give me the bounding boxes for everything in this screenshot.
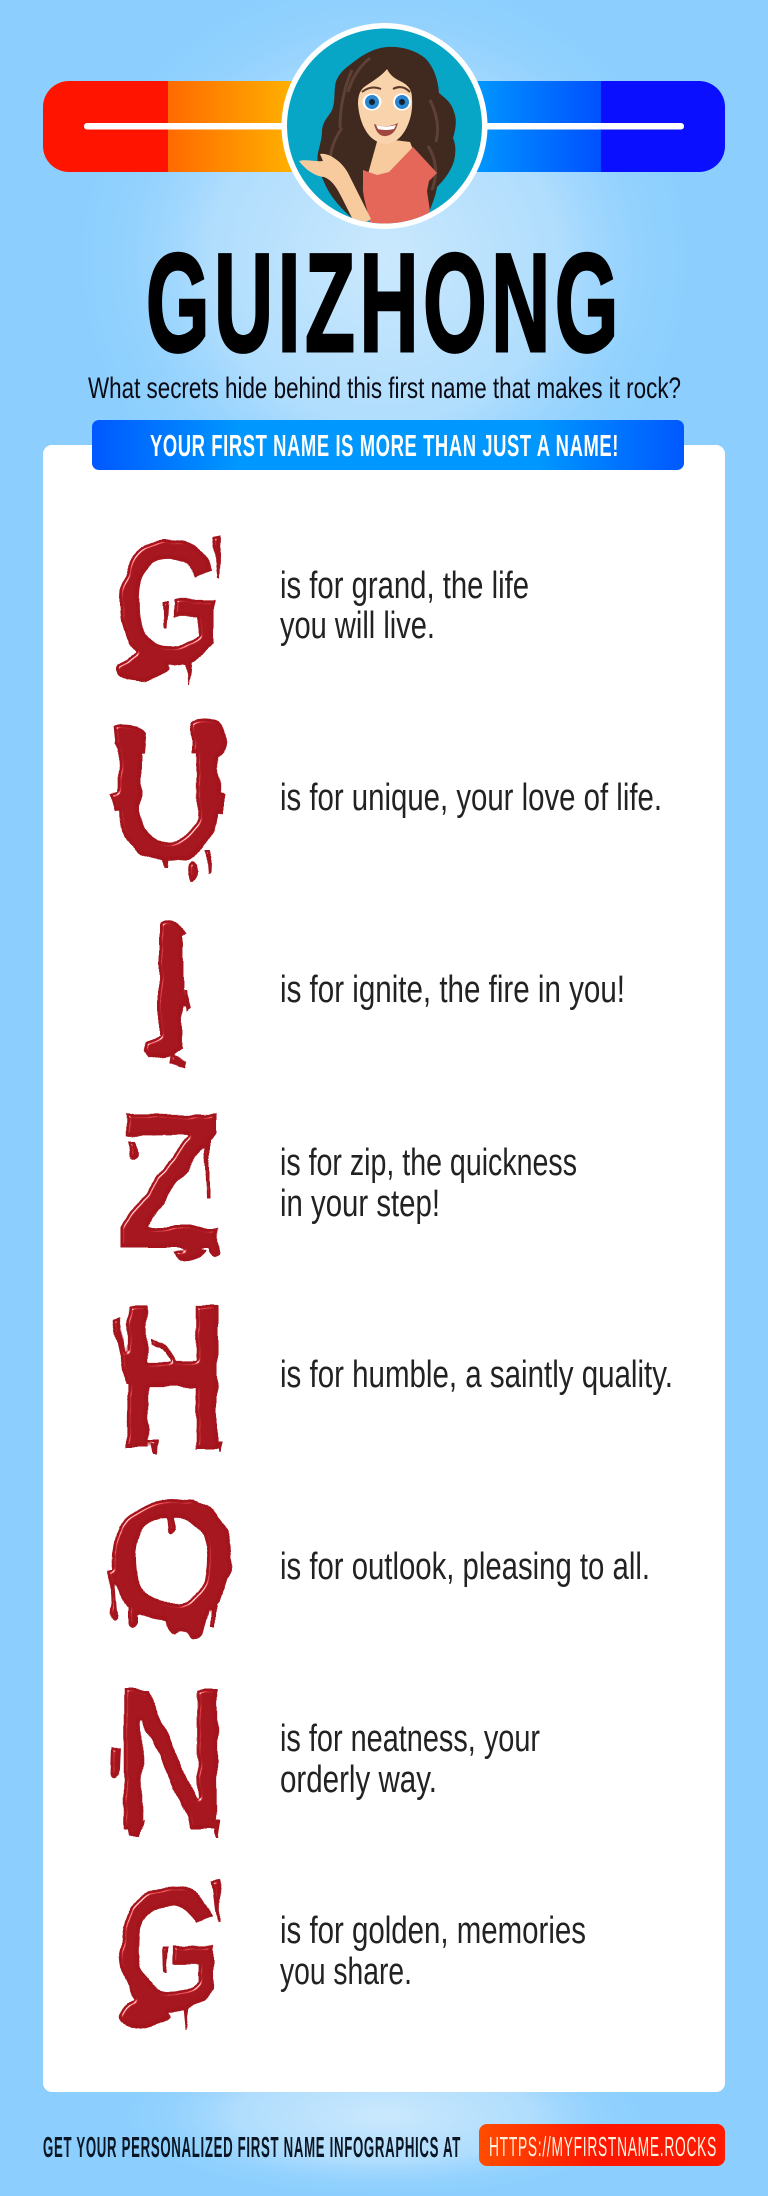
text: is for outlook, pleasing to all. bbox=[280, 1546, 650, 1588]
text: you will live. bbox=[280, 605, 435, 647]
text bbox=[280, 1142, 577, 1225]
row: letter O bbox=[104, 1462, 650, 1657]
text: is for grand, the life bbox=[280, 565, 529, 607]
letter G in dripping blood style: G bbox=[113, 503, 225, 702]
text bbox=[280, 1718, 540, 1801]
text: orderly way. bbox=[280, 1759, 437, 1801]
panel: white card bbox=[43, 445, 725, 2092]
text: is for zip, the quickness bbox=[280, 1142, 577, 1184]
header bar bbox=[43, 81, 725, 172]
banner bbox=[92, 420, 684, 470]
footer url button bbox=[479, 2124, 725, 2166]
row: letter H bbox=[112, 1261, 673, 1493]
letter Z in dripping blood style: Z bbox=[113, 1072, 225, 1290]
text: in your step! bbox=[280, 1183, 440, 1225]
row: letter G bbox=[113, 503, 529, 702]
letter O in dripping blood style: O bbox=[104, 1462, 240, 1657]
row: letter I bbox=[143, 889, 625, 1088]
text: is for ignite, the fire in you! bbox=[280, 969, 625, 1011]
row: letter U bbox=[108, 690, 662, 900]
letter I in dripping blood style: I bbox=[146, 889, 196, 1088]
text bbox=[280, 1910, 586, 1993]
letter U in dripping blood style: U bbox=[108, 690, 230, 900]
letter N in dripping blood style: N bbox=[112, 1645, 228, 1874]
text: is for neatness, your bbox=[280, 1718, 540, 1760]
avatar: woman portrait bbox=[282, 23, 488, 229]
row: letter Z bbox=[113, 1072, 577, 1290]
text: you share. bbox=[280, 1951, 412, 1993]
letter H in dripping blood style: H bbox=[116, 1261, 228, 1493]
text bbox=[280, 565, 529, 647]
text: is for golden, memories bbox=[280, 1910, 586, 1952]
row: letter N bbox=[109, 1645, 540, 1874]
text: is for unique, your love of life. bbox=[280, 777, 662, 819]
row: letter G second bbox=[113, 1849, 586, 2048]
letter G in dripping blood style: G bbox=[113, 1849, 225, 2048]
